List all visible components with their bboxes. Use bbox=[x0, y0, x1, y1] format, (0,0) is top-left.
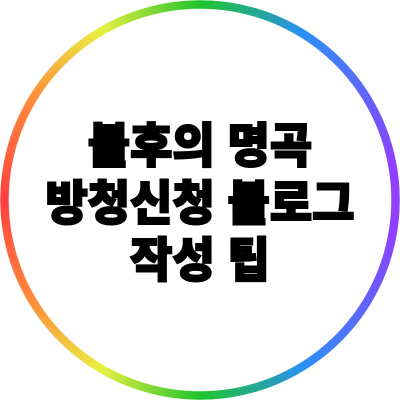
title: 불후의 명곡 bbox=[88, 119, 312, 173]
title bbox=[45, 119, 355, 288]
title: 방청신청 블로그 bbox=[45, 176, 355, 230]
title: 작성 팁 bbox=[130, 233, 270, 288]
